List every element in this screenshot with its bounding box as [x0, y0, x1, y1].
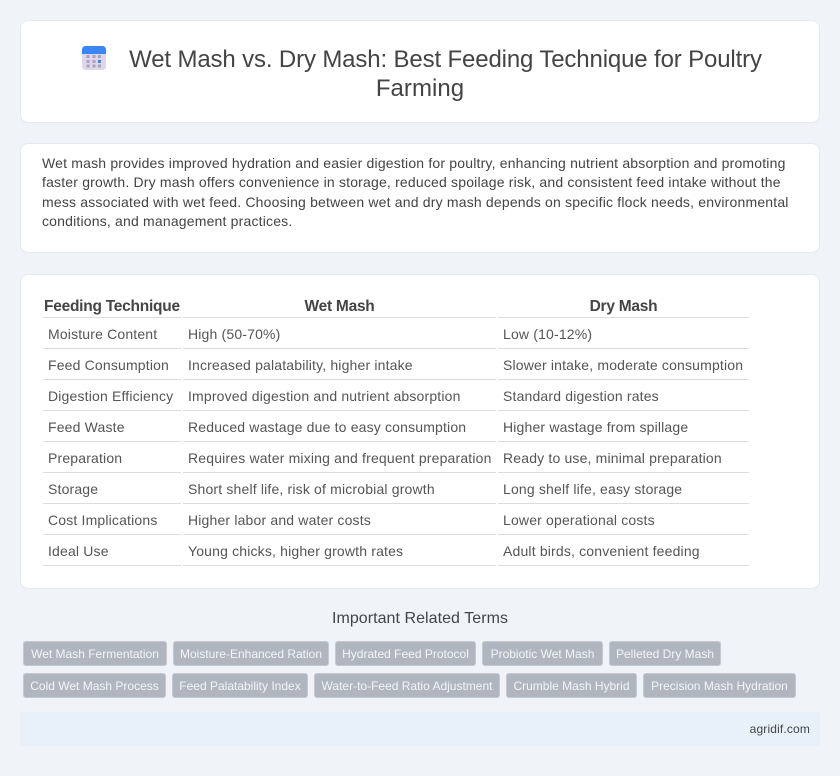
tags: related terms: Water-to-Feed Ratio Adjustment — [322, 679, 492, 693]
row: cost implications: Cost Implications — [48, 512, 157, 528]
row: preparation: Ready to use, minimal preparation — [503, 450, 722, 466]
row: cost implications: Higher labor and water costs — [188, 512, 371, 528]
row: feed consumption — [48, 357, 743, 373]
row: storage: Storage — [48, 481, 98, 497]
table header: Feeding Technique — [44, 298, 180, 315]
row: feed waste — [48, 419, 688, 435]
row: cost implications: Lower operational costs — [503, 512, 655, 528]
tags: related terms: Feed Palatability Index — [179, 679, 301, 693]
text block: summary — [42, 155, 789, 229]
row: preparation — [48, 450, 722, 466]
row: storage — [48, 481, 682, 497]
panel: comparison table card — [20, 274, 820, 589]
tags: related terms — [23, 641, 796, 698]
row: feed waste: Feed Waste — [48, 419, 125, 435]
heading: important related terms: Important Related Terms — [332, 610, 508, 627]
row: feed consumption: Increased palatability, higher intake — [188, 357, 413, 373]
row: feed waste: Reduced wastage due to easy consumption — [188, 419, 466, 435]
row: moisture content: Low (10-12%) — [503, 326, 592, 342]
row: preparation: Preparation — [48, 450, 122, 466]
row: storage: Long shelf life, easy storage — [503, 481, 682, 497]
row: moisture content: High (50-70%) — [188, 326, 280, 342]
table header — [44, 298, 657, 315]
table header: Dry Mash — [590, 298, 657, 315]
row: digestion efficiency — [48, 388, 659, 404]
row: moisture content — [48, 326, 592, 342]
text block: summary: conditions, and management practices. — [42, 213, 292, 229]
row: cost implications — [48, 512, 655, 528]
row: ideal use — [48, 543, 700, 559]
row: digestion efficiency: Improved digestion and nutrient absorption — [188, 388, 461, 404]
row: preparation: Requires water mixing and frequent preparation — [188, 450, 492, 466]
title — [129, 46, 762, 102]
text block: summary: mess associated with wet feed. Choosing between wet and dry mash depends on specific flock needs, environmental — [42, 194, 789, 210]
row: ideal use: Young chicks, higher growth rates — [188, 543, 403, 559]
row: storage: Short shelf life, risk of microbial growth — [188, 481, 435, 497]
panel: title card — [20, 20, 820, 123]
tags: related terms: Pelleted Dry Mash — [616, 647, 714, 661]
row: digestion efficiency: Digestion Efficiency — [48, 388, 173, 404]
footer bar — [20, 712, 820, 746]
row: feed consumption: Slower intake, moderate consumption — [503, 357, 743, 373]
title: Farming — [376, 75, 464, 102]
tags: related terms: Moisture-Enhanced Ration — [180, 647, 322, 661]
tags: related terms: Cold Wet Mash Process — [30, 679, 159, 693]
row: ideal use: Ideal Use — [48, 543, 109, 559]
title: Wet Mash vs. Dry Mash: Best Feeding Technique for Poultry — [129, 46, 762, 73]
row: feed waste: Higher wastage from spillage — [503, 419, 688, 435]
row: moisture content: Moisture Content — [48, 326, 157, 342]
panel: summary card — [20, 143, 820, 253]
row: digestion efficiency: Standard digestion rates — [503, 388, 659, 404]
tags: related terms: Hydrated Feed Protocol — [342, 647, 469, 661]
row: feed consumption: Feed Consumption — [48, 357, 169, 373]
text block: summary: Wet mash provides improved hydration and easier digestion for poultry, enhancing nutrient absorption and promoting — [42, 155, 786, 171]
icon: calendar — [82, 46, 106, 70]
text block: summary: faster growth. Dry mash offers convenience in storage, reduced spoilage risk, and consistent feed intake without the — [42, 174, 781, 190]
row: ideal use: Adult birds, convenient feeding — [503, 543, 700, 559]
tags: related terms: Wet Mash Fermentation — [31, 647, 159, 661]
table header: Wet Mash — [304, 298, 375, 315]
tags: related terms: Probiotic Wet Mash — [491, 647, 594, 661]
tags: related terms: Precision Mash Hydration — [651, 679, 788, 693]
footer text: agridif.com — [750, 722, 810, 736]
tags: related terms: Crumble Mash Hybrid — [513, 679, 630, 693]
